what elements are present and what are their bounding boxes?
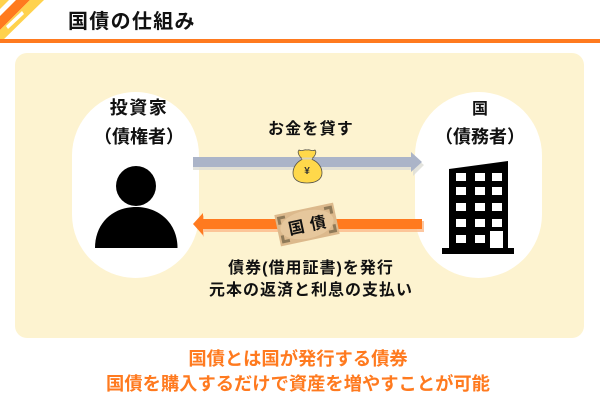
icon: bond certificate: 国 (287, 219, 306, 239)
icon: money bag (293, 150, 322, 183)
investor label: 投資家 (110, 98, 168, 118)
summary line 1: 国債とは国が発行する債券 (188, 348, 408, 369)
icon: person (95, 166, 178, 248)
panel: bond mechanism (15, 53, 584, 338)
title: 国債の仕組み (68, 10, 196, 33)
icon: bond certificate (274, 203, 340, 246)
arrow: bond to investor (193, 213, 424, 237)
icon: bond certificate: 債 (308, 212, 328, 234)
header corner stripes (0, 0, 44, 43)
bond issue label: 債券(借用証書)を発行 (228, 258, 394, 277)
lend money label: お金を貸す (268, 119, 354, 138)
panel: investor (72, 92, 199, 278)
panel: government (415, 92, 542, 278)
arrow: money to government (193, 152, 424, 176)
creditor label: （債権者） (94, 127, 184, 147)
debtor label: （債務者） (435, 127, 525, 147)
repayment label: 元本の返済と利息の支払い (209, 280, 413, 299)
icon: money bag: ¥ (304, 166, 310, 177)
icon: building (442, 161, 514, 254)
government label: 国 (472, 101, 488, 118)
summary line 2: 国債を購入するだけで資産を増やすことが可能 (106, 373, 490, 394)
header rule (0, 39, 600, 43)
